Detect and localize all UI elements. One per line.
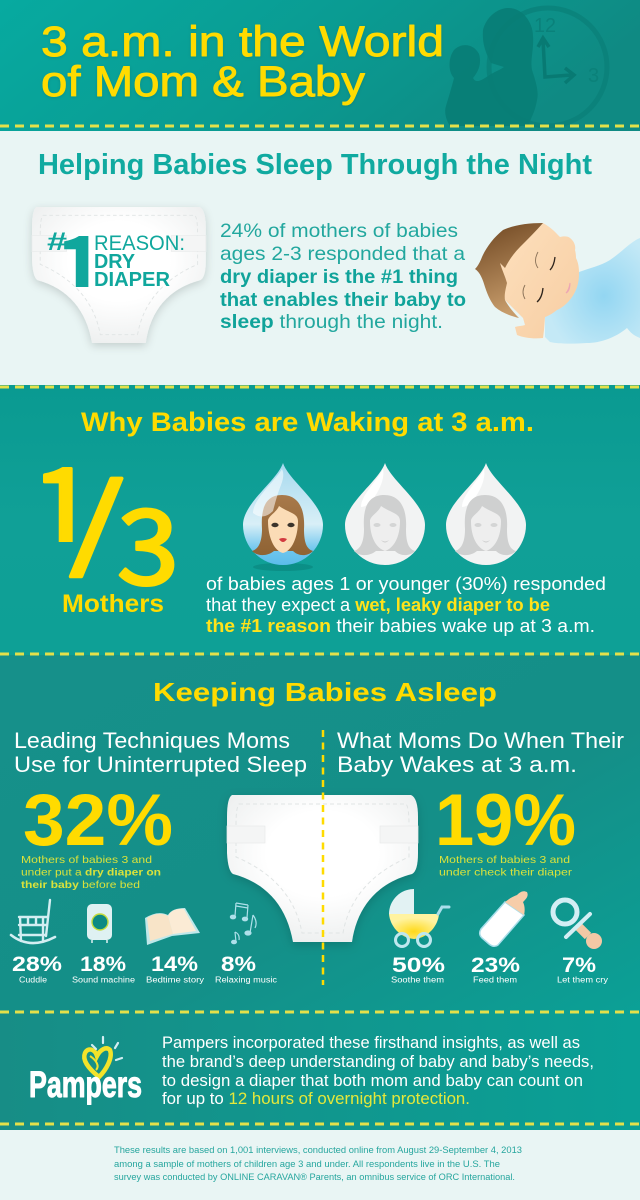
text: pampers insights: for up to 12 hours of overnight protection. xyxy=(162,1090,470,1108)
text: 24 percent of mothers: that enables their baby to xyxy=(220,289,466,311)
subheading: what moms do: What Moms Do When Their xyxy=(337,728,624,753)
stats row: right responses: 23% xyxy=(471,954,520,977)
icon: coloured drop with mother xyxy=(243,463,323,571)
header band xyxy=(0,0,640,131)
stats row: left techniques xyxy=(12,953,277,984)
subheading: what moms do: Baby Wakes at 3 a.m. xyxy=(337,752,577,777)
text: pampers insights: to design a diaper that both mom and baby can count on xyxy=(162,1072,583,1090)
caption: 19 percent: Mothers of babies 3 and xyxy=(439,854,570,866)
icon: rocking chair xyxy=(11,900,55,943)
caption: 19 percent: under check their diaper xyxy=(439,866,573,878)
text: methodology: among a sample of mothers of children age 3 and under. All respondents live in the U.S. The xyxy=(114,1159,500,1169)
text: methodology xyxy=(114,1145,522,1182)
stat: one third: 3 xyxy=(117,465,179,614)
panel: pampers message xyxy=(0,1012,640,1130)
icon: music notes xyxy=(230,903,256,944)
icon: sound machine xyxy=(87,904,112,943)
logo: pampers xyxy=(29,1037,142,1105)
stats row: right responses: Feed them xyxy=(473,976,517,984)
logo: pampers: Pampers xyxy=(29,1064,142,1105)
caption: 19 percent xyxy=(439,854,573,878)
subheading: leading techniques: Use for Uninterrupted Sleep xyxy=(14,752,307,777)
title: 3 a.m. in the World xyxy=(41,18,444,66)
label: mothers: Mothers xyxy=(62,590,164,618)
text: pampers insights: the brand’s deep understanding of baby and baby’s needs, xyxy=(162,1053,594,1071)
text: 24 percent of mothers: sleep through the night. xyxy=(220,311,443,333)
text: 24 percent of mothers: 24% of mothers of babies xyxy=(220,220,458,242)
panel: keeping babies asleep xyxy=(0,655,640,1012)
icon: center diaper xyxy=(227,795,418,942)
stats row: right responses: 7% xyxy=(562,954,596,977)
text: methodology: These results are based on 1,001 interviews, conducted online from August 29-September 4, 2013 xyxy=(114,1145,522,1155)
stats row: left techniques: Cuddle xyxy=(19,976,47,984)
caption: 32 percent: under put a dry diaper on xyxy=(21,866,161,878)
stat: one third: / xyxy=(67,456,126,604)
heading: why babies: Why Babies are Waking at 3 a.m. xyxy=(81,407,534,437)
stats row: right responses: Let them cry xyxy=(557,976,608,984)
panel: helping babies sleep xyxy=(28,153,640,350)
icon: grey drop two xyxy=(446,463,526,565)
icon: baby bottle xyxy=(480,891,528,946)
text: 24 percent of mothers: dry diaper is the #1 thing xyxy=(220,266,458,288)
panel: why babies wake xyxy=(0,385,640,655)
illustration: sleeping baby xyxy=(475,223,640,344)
icon: open book xyxy=(145,908,200,945)
clock silhouette xyxy=(489,8,607,126)
text: methodology: survey was conducted by ONLINE CARAVAN® Parents, an omnibus service of ORC International. xyxy=(114,1172,515,1182)
text: babies ages 1 or younger: that they expect a wet, leaky diaper to be xyxy=(206,594,550,615)
stat: 32 percent: 32% xyxy=(23,780,173,861)
stat: one third: 1 xyxy=(30,415,97,589)
icon: diaper with #1 reason: REASON: xyxy=(94,232,185,255)
mother and baby silhouette xyxy=(445,8,538,126)
text: babies ages 1 or younger: the #1 reason their babies wake up at 3 a.m. xyxy=(206,615,595,636)
text: pampers insights xyxy=(162,1034,594,1108)
text: babies ages 1 or younger xyxy=(206,573,606,636)
stat: 19 percent: 19% xyxy=(435,780,576,861)
caption: 32 percent xyxy=(21,854,161,891)
icon: diaper with #1 reason: DRY xyxy=(94,251,136,273)
stats row: left techniques: 28% xyxy=(12,953,62,976)
stats row: left techniques: 18% xyxy=(80,953,126,976)
heading: keeping babies: Keeping Babies Asleep xyxy=(153,677,497,707)
stats row: left techniques: 14% xyxy=(151,953,198,976)
text: 24 percent of mothers xyxy=(220,220,466,333)
stats row: left techniques: 8% xyxy=(221,953,256,976)
stat: one third xyxy=(43,467,174,587)
title xyxy=(41,18,444,106)
stats row: left techniques: Sound machine xyxy=(72,976,135,984)
stats row: left techniques: Bedtime story xyxy=(146,976,204,984)
caption: 32 percent: their baby before bed xyxy=(21,879,140,891)
icon: stroller xyxy=(389,889,449,946)
caption: 32 percent: Mothers of babies 3 and xyxy=(21,854,152,866)
text: 24 percent of mothers: ages 2-3 responded that a xyxy=(220,243,465,265)
icon: diaper with #1 reason: 1 xyxy=(55,198,106,323)
stats row: right responses xyxy=(391,954,608,984)
icon: grey drop one xyxy=(345,463,425,565)
stats row: right responses: Soothe them xyxy=(391,976,444,984)
subheading: leading techniques xyxy=(14,728,307,777)
icon: diaper with #1 reason: # xyxy=(47,228,67,256)
clock silhouette: 12 xyxy=(534,15,556,37)
stats row: right responses: 50% xyxy=(392,954,445,977)
footnote panel xyxy=(0,1130,640,1200)
title: of Mom & Baby xyxy=(41,58,366,106)
text: pampers insights: Pampers incorporated these firsthand insights, as well as xyxy=(162,1034,580,1052)
text: babies ages 1 or younger: of babies ages 1 or younger (30%) responded xyxy=(206,573,606,594)
subheading: what moms do xyxy=(337,728,624,777)
icon: diaper with #1 reason xyxy=(32,198,206,343)
icon: pacifier xyxy=(553,900,602,949)
subheading: leading techniques: Leading Techniques Moms xyxy=(14,728,290,753)
clock silhouette: 3 xyxy=(588,65,599,87)
icon: diaper with #1 reason: DIAPER xyxy=(94,269,171,291)
stats row: left techniques: Relaxing music xyxy=(215,976,277,984)
heading: helping babies: Helping Babies Sleep Through the Night xyxy=(38,149,593,181)
